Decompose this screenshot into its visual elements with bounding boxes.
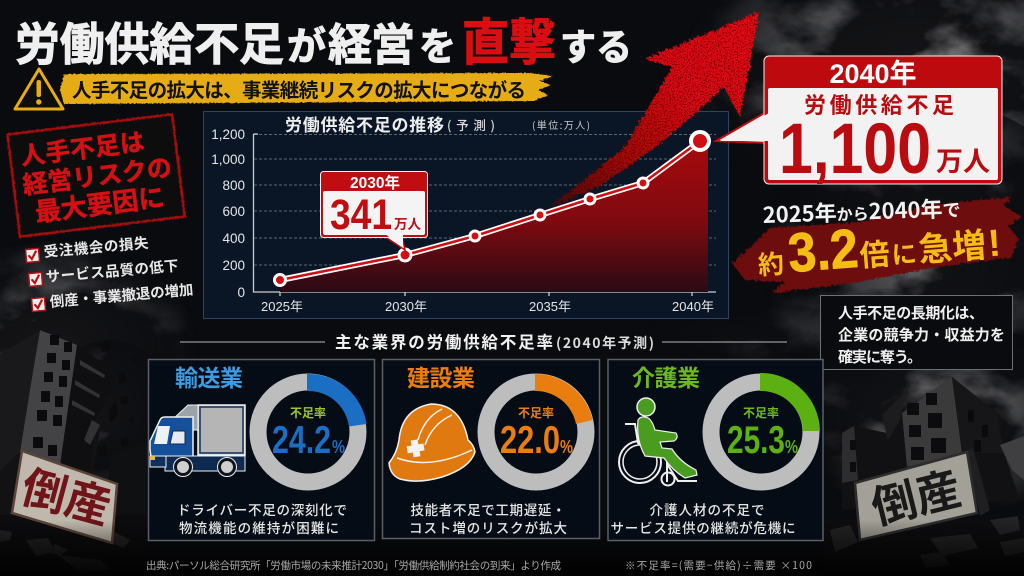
y axis labels: [211, 127, 245, 300]
callout: 3.2x increase: 2025年から2040年で: [762, 191, 961, 230]
callout: 3.2x increase: [732, 191, 1022, 293]
description: care: 介護人材の不足で: [650, 503, 764, 518]
callout: 2040 value: 万人: [936, 140, 990, 179]
chart subtitle: (予測): [447, 115, 495, 134]
y axis labels: 400: [222, 231, 245, 246]
heading: transport: 輸送業: [175, 359, 243, 393]
heading: care: 介護業: [632, 359, 700, 393]
title: が: [287, 16, 326, 72]
title: 労働供給不足: [15, 8, 284, 73]
title: を: [419, 16, 456, 71]
donut: 25.3%: [711, 373, 820, 482]
section heading: 主な業界の労働供給不足率: [335, 329, 553, 353]
donut: 25.3%: 不足率: [743, 404, 779, 421]
panel: transport industry: [148, 359, 374, 540]
callout: 2040 value: 1,100: [779, 110, 931, 189]
callout: 2030 value: 万人: [394, 213, 421, 233]
checklist: [25, 232, 194, 313]
callout: 2030 value: [320, 172, 428, 250]
donut: 24.2%: 不足率: [290, 404, 326, 421]
y axis labels: 1,000: [211, 152, 245, 167]
icon: wheelchair: [619, 398, 697, 486]
illustration: bankruptcy sign right: 倒産: [864, 452, 967, 537]
heading: construction: 建設業: [407, 359, 475, 393]
callout: 3.2x increase: 約: [756, 244, 785, 283]
chart title: 労働供給不足の推移: [285, 111, 444, 136]
donut: 24.2%: %: [332, 437, 345, 457]
callout: 2040 value: [716, 56, 1002, 189]
title: [15, 3, 632, 75]
text box: long-term shortage: 人手不足の長期化は、: [838, 302, 984, 323]
x axis labels: 2030年: [385, 299, 427, 314]
y axis labels: 200: [222, 258, 245, 273]
text box: long-term shortage: [820, 296, 1012, 370]
section heading: [180, 329, 787, 353]
panel: care industry: [608, 359, 823, 540]
callout: risk stamp: [7, 114, 185, 237]
callout: 2030 value: 2030年: [350, 173, 400, 192]
x axis labels: 2035年: [529, 299, 571, 314]
text box: long-term shortage: 企業の競争力・収益力を: [838, 324, 1005, 345]
donut: 22.0%: [486, 374, 592, 482]
x axis labels: 2040年: [672, 299, 714, 314]
title: 経営: [328, 9, 415, 73]
description: construction: 技能者不足で工期遅延・: [410, 502, 566, 518]
donut: 22.0%: 不足率: [518, 404, 554, 421]
title: する: [560, 17, 632, 71]
check item 1: 受注機会の損失: [43, 232, 150, 262]
callout: risk stamp: 経営リスクの: [20, 148, 174, 202]
callout: risk stamp: 最大要因に: [33, 177, 166, 230]
source note: 出典:パーソル総合研究所「労働市場の未来推計2030」「労働供給制約社会の到来」より作成: [146, 558, 562, 573]
x axis labels: [261, 299, 714, 314]
description: care: [610, 503, 796, 536]
chart unit: (単位:万人): [532, 117, 590, 132]
donut: 24.2%: 24.2: [272, 419, 331, 462]
y axis labels: 1,200: [211, 127, 245, 142]
donut: 24.2%: [258, 374, 366, 482]
callout: 3.2x increase: 3.2: [786, 217, 860, 284]
text box: long-term shortage: 確実に奪う。: [838, 346, 922, 367]
large rising arrow: [548, 12, 759, 208]
y axis labels: 800: [222, 178, 245, 193]
icon: helmet: [389, 404, 475, 481]
panel: line chart: [204, 111, 728, 318]
donut: 25.3%: 25.3: [727, 419, 785, 462]
callout: 3.2x increase: !: [986, 223, 1002, 265]
illustration: collapsing building left: [0, 330, 146, 576]
callout: 2040 value: 2040年: [829, 59, 917, 89]
icon: warning triangle: [15, 69, 63, 109]
donut: 22.0%: 22.0: [500, 419, 560, 462]
description: construction: [409, 502, 567, 536]
area under line: [280, 141, 708, 292]
formula note: ※不足率=(需要−供給)÷需要 ×100: [625, 558, 812, 573]
callout: 2030 value: 341: [330, 191, 392, 239]
line series: [274, 132, 709, 286]
callout: 3.2x increase: に: [890, 234, 918, 272]
title: 直撃: [462, 3, 556, 75]
icon: truck: [150, 405, 245, 476]
section heading: (2040年予測): [556, 333, 654, 353]
x axis labels: 2025年: [261, 299, 303, 314]
donut: 25.3%: %: [785, 437, 798, 457]
subtitle banner: 人手不足の拡大は、事業継続リスクの拡大につながる: [72, 74, 526, 103]
description: construction: コスト増のリスクが拡大: [409, 520, 567, 536]
illustration: bankruptcy sign left: 倒産: [15, 451, 119, 537]
description: transport: 物流機能の維持が困難に: [179, 520, 339, 536]
callout: risk stamp: 人手不足は: [18, 123, 147, 173]
check item 3: 倒産・事業撤退の増加: [49, 278, 194, 312]
illustration: collapsing building right: [824, 377, 1024, 576]
check item 2: サービス品質の低下: [45, 254, 179, 287]
description: transport: [177, 503, 347, 536]
donut: 22.0%: %: [560, 437, 573, 457]
y axis labels: 0: [237, 285, 245, 300]
y axis labels: 600: [222, 204, 245, 219]
description: care: サービス提供の継続が危機に: [610, 520, 796, 536]
description: transport: ドライバー不足の深刻化で: [177, 503, 347, 518]
callout: 2040 value: 労働供給不足: [804, 88, 954, 120]
callout: 3.2x increase: 急増: [916, 218, 988, 272]
callout: 3.2x increase: 倍: [858, 229, 891, 276]
panel: construction industry: [382, 359, 600, 538]
